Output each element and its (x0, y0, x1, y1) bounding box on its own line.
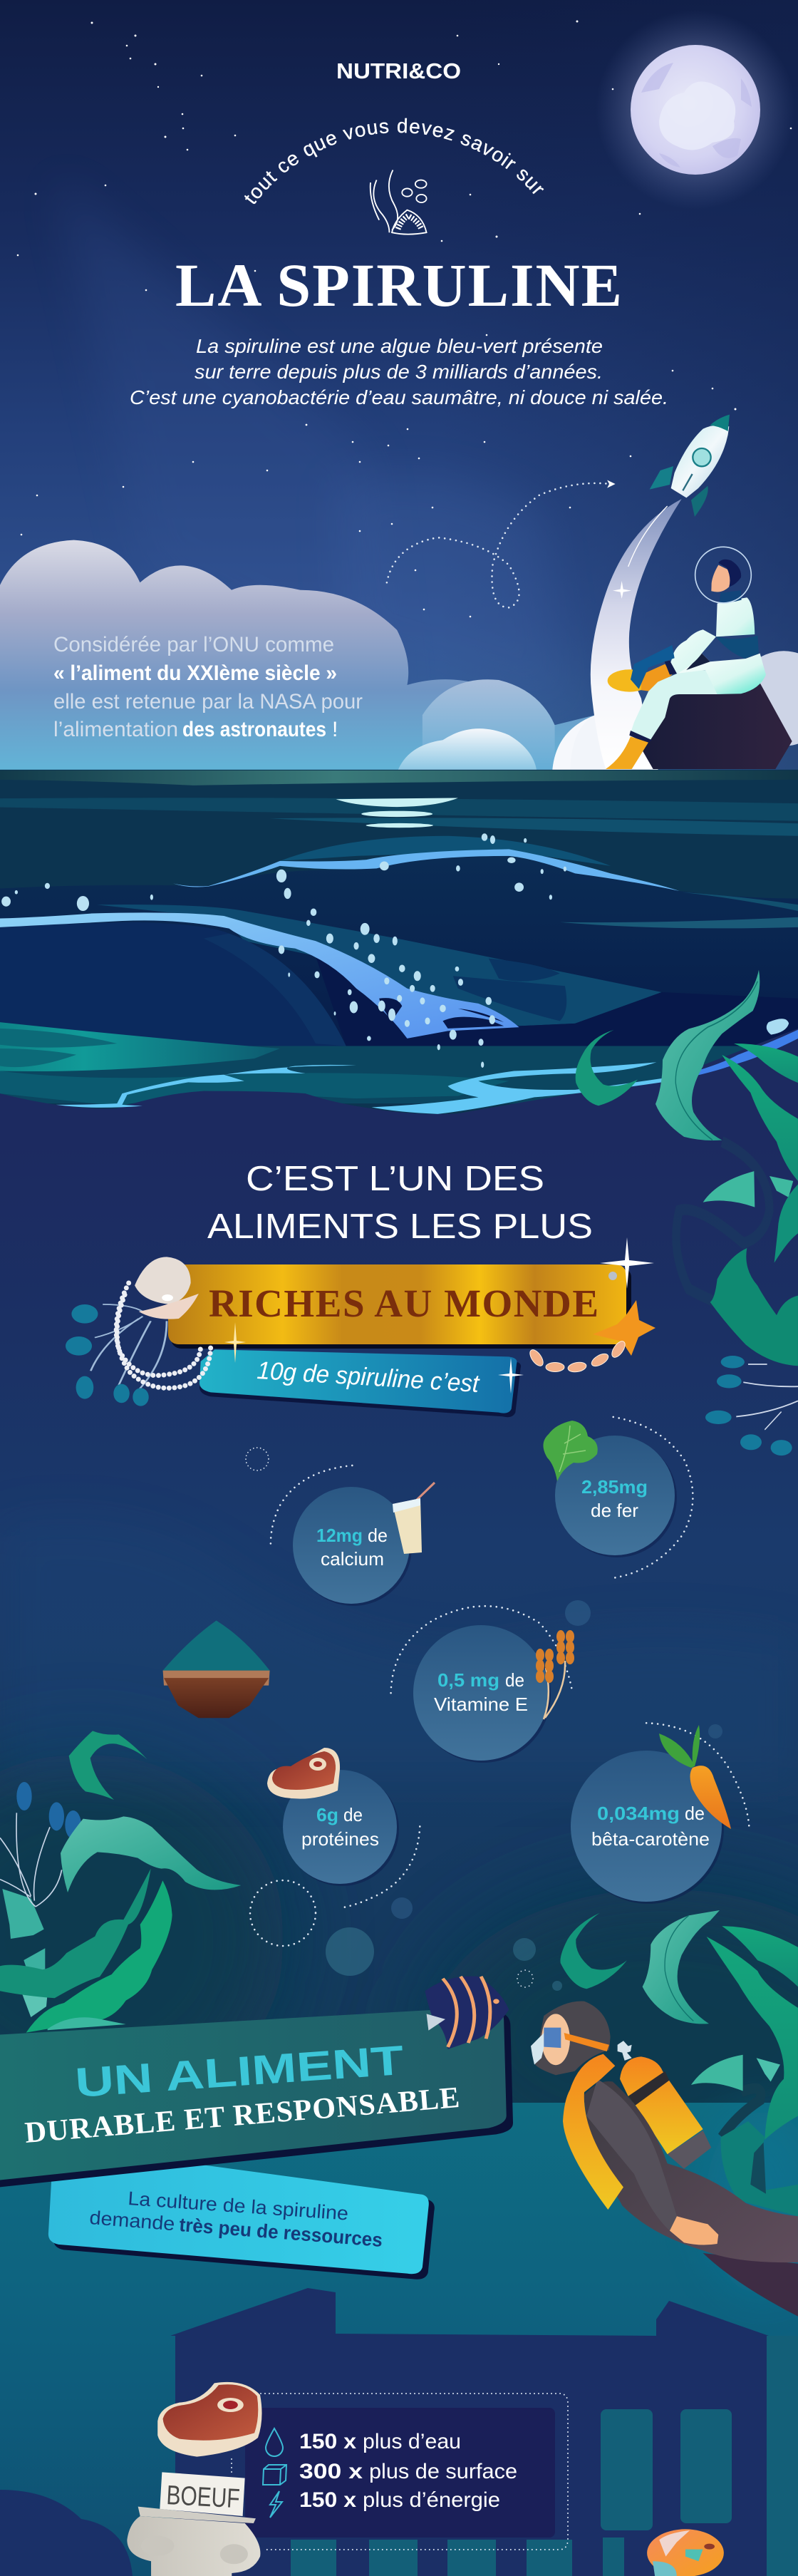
panel: resource comparison (232, 2394, 568, 2550)
dotted flight path with arrow (387, 480, 616, 607)
icon: lightning (270, 2491, 282, 2518)
nutrient: beta carotene: 0,034mg (597, 1803, 680, 1824)
tank (618, 2041, 711, 2169)
cyan text box: demande (89, 2207, 175, 2235)
bead necklace (527, 1339, 628, 1374)
nutrient: proteins: protéines (301, 1828, 379, 1850)
stat lines: 150 x (299, 2430, 356, 2453)
cyan subtitle ribbon (200, 1349, 521, 1417)
icon: wheat (536, 1630, 574, 1719)
panel text: ONU and NASA: elle est retenue par la NASA pour (53, 690, 363, 713)
intro text (130, 335, 668, 408)
foam (56, 1019, 798, 1114)
wave crest main (0, 912, 519, 1039)
curved tagline: tout ce que vous devez savoir sur (244, 118, 544, 204)
stat lines: plus d’eau (363, 2430, 461, 2453)
intro text: C’est une cyanobactérie d’eau saumâtre, ni douce ni salée. (130, 386, 668, 408)
nutrient: vitamin E (413, 1625, 574, 1763)
stat lines (299, 2430, 517, 2512)
section heading: C’EST L’UN DES (246, 1160, 544, 1198)
nutrient: iron: de fer (591, 1500, 638, 1521)
rock (641, 683, 792, 769)
anemone left of banner (66, 1304, 167, 1406)
stars (17, 20, 792, 617)
icon: surface cube (263, 2465, 286, 2485)
sparkles (224, 1237, 654, 1393)
fish top (425, 1977, 509, 2049)
intro text: La spiruline est une algue bleu-vert présente (196, 335, 603, 357)
clouds (0, 540, 662, 773)
seaweed and water behind the diver (560, 1910, 798, 2216)
panel text: ONU and NASA: ! (332, 718, 338, 741)
illustration: rocket and astronaut (570, 415, 798, 770)
icon: steak (267, 1748, 340, 1799)
cyan text box: très peu de ressources (179, 2214, 383, 2251)
title: La Spiruline: LA SPIRULINE (175, 251, 622, 319)
icon: carrot (659, 1725, 731, 1829)
nutrient: proteins: de (343, 1804, 363, 1825)
moon reflections (336, 798, 458, 828)
deep water (0, 1029, 798, 1135)
stat lines: plus de surface (369, 2460, 517, 2483)
intro text: sur terre depuis plus de 3 milliards d’années. (195, 361, 603, 383)
icon: spinach leaf (543, 1421, 598, 1481)
rocket (650, 415, 730, 517)
nutrient: proteins: 6g (316, 1804, 338, 1825)
diver (531, 2001, 798, 2317)
title banner: un aliment durable (0, 2006, 513, 2187)
nutrient: beta carotene: bêta-carotène (591, 1828, 710, 1850)
icon: water drop (266, 2428, 283, 2456)
section heading (207, 1160, 593, 1246)
icon: bowl of spirulina (163, 1620, 270, 1718)
panel text: ONU and NASA: Considérée par l’ONU comme (53, 633, 334, 656)
panel text: ONU and NASA (53, 633, 363, 741)
title banner: un aliment durable: DURABLE ET RESPONSABLE (24, 2081, 461, 2150)
nutrient: beta carotene (571, 1725, 731, 1904)
nutrient: beta carotene: de (685, 1803, 705, 1824)
droplets (1, 833, 566, 1068)
cyan text box: La culture de la spiruline (128, 2188, 349, 2225)
section heading: ALIMENTS LES PLUS (207, 1207, 593, 1246)
nutrient: calcium (293, 1483, 435, 1606)
icon: large steak (157, 2382, 262, 2457)
moon (596, 10, 795, 210)
temple silhouette (0, 2288, 798, 2576)
seaweed top right (576, 970, 798, 1456)
rocket exhaust trail (591, 499, 682, 768)
panel text: ONU and NASA: l’alimentation (53, 718, 178, 741)
panel text: ONU and NASA: des astronautes (182, 718, 326, 741)
starfish (593, 1300, 656, 1356)
nutrient: calcium: de (368, 1525, 388, 1546)
seaweed bottom left (0, 1731, 241, 2033)
panel text: ONU and NASA: « l’aliment du XXIème siècle » (53, 661, 337, 685)
stat lines: 300 x (299, 2460, 363, 2483)
nutrient: calcium: 12mg (316, 1525, 363, 1546)
panel: night sky background (0, 0, 798, 777)
cyan text box (48, 2145, 435, 2279)
stat lines: 150 x (299, 2488, 356, 2512)
wave crest top (173, 849, 680, 891)
gold banner (168, 1264, 631, 1349)
column with BOEUF plaque (127, 2472, 260, 2576)
fish bottom (647, 2529, 724, 2576)
gold banner: RICHES AU MONDE (209, 1282, 598, 1325)
column with BOEUF plaque: BOEUF (166, 2480, 241, 2514)
panel: sea surface waves (0, 770, 798, 1135)
icon: glass of milk (393, 1483, 435, 1554)
nutrient: vitamin E: de (505, 1669, 524, 1691)
nutrient: proteins (267, 1748, 399, 1886)
nutrient: vitamin E: 0,5 mg (437, 1669, 499, 1691)
icon: seaweed and spirulina (370, 170, 427, 235)
dotted arcs around nutrients (271, 1417, 749, 1908)
logo: NUTRI&CO: NUTRI&CO (336, 58, 461, 83)
pearl necklace and shell (116, 1257, 211, 1388)
panel: underwater background (0, 1133, 798, 2576)
nutrient: iron (543, 1421, 677, 1557)
cyan subtitle ribbon: 10g de spiruline c’est (256, 1356, 481, 1398)
astronaut (606, 547, 766, 769)
nutrient: calcium: calcium (321, 1548, 384, 1570)
nutrient: iron: 2,85mg (581, 1476, 648, 1498)
stat lines: plus d’énergie (363, 2488, 500, 2512)
nutrient: vitamin E: Vitamine E (434, 1694, 528, 1715)
title banner: un aliment durable: UN ALIMENT (73, 2037, 405, 2106)
small dotted bubbles (246, 1448, 722, 1991)
